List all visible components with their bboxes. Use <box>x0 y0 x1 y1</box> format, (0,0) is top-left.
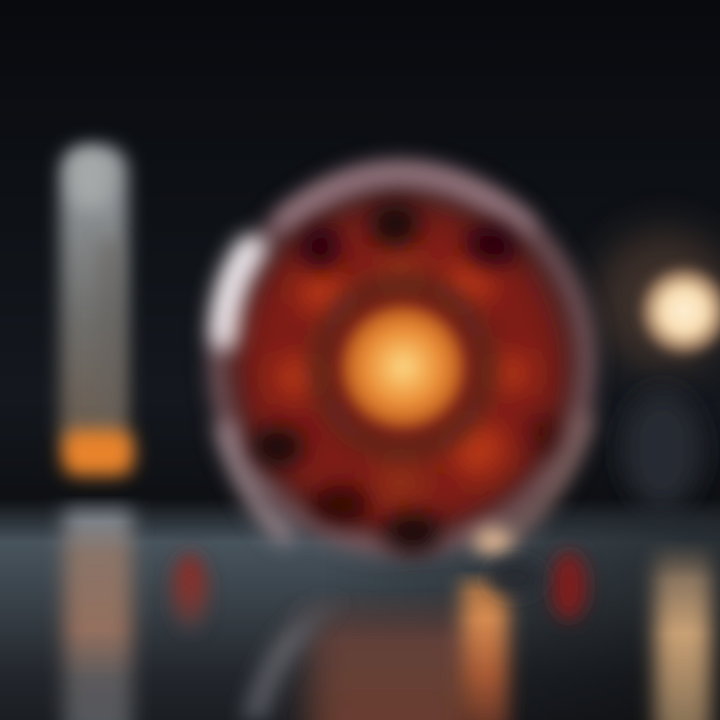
disc rim top arc <box>285 171 525 225</box>
floor <box>0 498 720 720</box>
disc rim ring <box>218 178 586 546</box>
object: bottom highlight <box>473 526 513 556</box>
tube dark centre <box>96 238 118 314</box>
disc dark backing <box>224 184 580 540</box>
disc rim bottom-right arc <box>510 420 585 535</box>
tube orange base <box>62 430 134 476</box>
object: right red bead <box>551 552 587 620</box>
disc glowing core <box>343 307 463 427</box>
light: right lamp <box>634 261 720 361</box>
tube highlight <box>70 150 110 210</box>
background <box>0 302 720 434</box>
object: red disc <box>218 171 586 555</box>
disc dark spots <box>249 200 561 555</box>
object: tube <box>60 145 134 476</box>
disc rim highlight left <box>225 250 250 335</box>
right bead shape <box>551 552 587 620</box>
disc reflection brown body <box>310 590 480 720</box>
disc reflection orange highlight <box>462 570 508 720</box>
disc red face <box>242 208 562 528</box>
glow: right lamp halo <box>595 230 720 370</box>
reflection: disc <box>240 570 508 720</box>
reflection: right lamp <box>655 540 711 720</box>
reflection: tube <box>64 495 132 720</box>
disc reflection grey band <box>236 609 328 720</box>
object: left red bead <box>173 554 207 630</box>
disc orange patches <box>275 241 530 510</box>
object: dark base under disc <box>487 560 543 596</box>
object: dark shape at right <box>622 390 702 510</box>
disc dark ring around core <box>321 285 485 449</box>
left bead shape <box>173 554 207 630</box>
tube body <box>60 145 128 455</box>
disc rim bottom-left arc <box>225 430 285 535</box>
